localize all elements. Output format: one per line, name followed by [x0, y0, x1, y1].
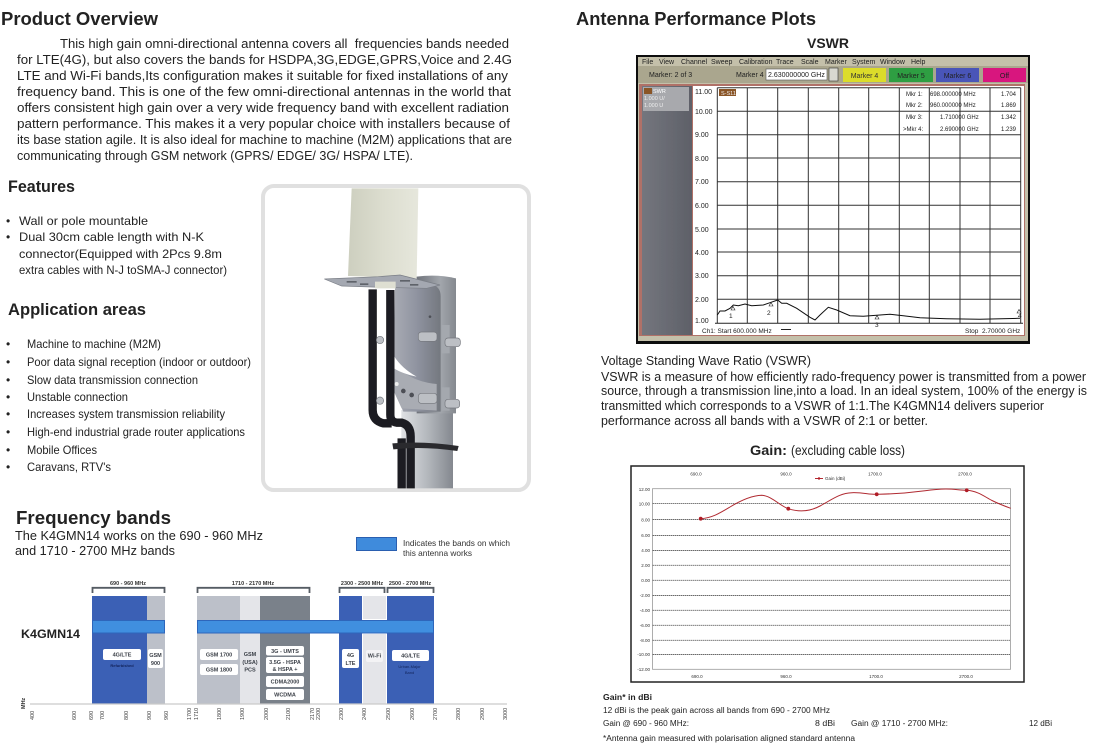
- frequency axis: 2900: [480, 708, 486, 720]
- text block: product overview paragraph: offers consistent high gain over a very wide frequency band with excellent radiation: [17, 101, 509, 115]
- list: application areas: Machine to machine (M2M): [27, 337, 161, 351]
- band notes: [110, 663, 421, 675]
- analyzer marker toolbar: Marker 4: [851, 73, 878, 80]
- frequency axis: 960: [164, 711, 170, 720]
- icon: antenna on mounting pole: [324, 188, 460, 488]
- gain curve: [701, 489, 1011, 519]
- band range labels: 2300 - 2500 MHz: [341, 581, 383, 587]
- analyzer menu bar: [642, 59, 926, 66]
- chart: VSWR analyzer screenshot: S-S11: [721, 91, 736, 97]
- list: application areas: Increases system transmission reliability: [27, 407, 225, 421]
- gain x axis labels: 1700.0: [869, 674, 883, 679]
- band label boxes: [103, 646, 429, 700]
- gain y axis labels: -8.00: [640, 638, 650, 643]
- chart: VSWR analyzer screenshot: 1: [729, 313, 733, 320]
- analyzer menu bar: Scale: [801, 59, 819, 66]
- text block: gain notes: Gain @ 690 - 960 MHz:: [603, 719, 689, 728]
- analyzer menu bar: Channel: [681, 59, 708, 66]
- list: application areas: •: [6, 337, 10, 351]
- analyzer menu bar: Marker: [825, 59, 847, 66]
- VSWR y axis labels: 9.00: [695, 132, 709, 139]
- text block: gain notes: 8 dBi: [815, 719, 835, 728]
- text block: frequency description: [15, 528, 263, 558]
- VSWR y axis labels: 11.00: [695, 89, 712, 96]
- band label text: 3.5G - HSPA: [269, 660, 301, 666]
- frequency axis: 900: [147, 711, 153, 720]
- band range labels: 1710 - 2170 MHz: [232, 581, 274, 587]
- gain y axis labels: -2.00: [640, 593, 650, 598]
- frequency axis: 2700: [433, 708, 439, 720]
- text block: VSWR explanation: Voltage Standing Wave Ratio (VSWR): [601, 354, 811, 368]
- VSWR y axis labels: 6.00: [695, 203, 709, 210]
- band label text: GSM 1700: [206, 652, 232, 658]
- gain y axis labels: -6.00: [640, 623, 650, 628]
- list: application areas: •: [6, 443, 10, 457]
- band label text: 3G - UMTS: [271, 649, 299, 655]
- text block: gain notes: Gain* in dBi: [603, 693, 652, 702]
- analyzer plot grid: [715, 88, 1023, 323]
- analyzer marker toolbar: Marker 5: [897, 73, 925, 80]
- gain plot area and grid: [652, 489, 1010, 669]
- text block: frequency description: and 1710 - 2700 MHz bands: [15, 543, 175, 558]
- text block: product overview paragraph: for LTE(4G), but also covers the bands for HSDPA,3G,EDGE,GPRS,Voice and 2.4G: [17, 53, 512, 67]
- frequency axis: 3000: [503, 708, 509, 720]
- text block: product overview paragraph: This high gain omni-directional antenna covers all frequencies bands needed: [60, 37, 509, 51]
- list: features: •: [6, 214, 10, 228]
- gain legend: [815, 476, 846, 481]
- list: application areas: Poor data signal reception (indoor or outdoor): [27, 355, 251, 369]
- text block: frequency description: The K4GMN14 works on the 690 - 960 MHz: [15, 528, 263, 543]
- list: application areas: Unstable connection: [27, 390, 128, 404]
- list: application areas: High-end industrial grade router applications: [27, 425, 245, 439]
- sweep range: Stop 2.70000 GHz: [965, 328, 1020, 335]
- band label text: [113, 649, 420, 698]
- VSWR y axis labels: 7.00: [695, 179, 709, 186]
- chart: VSWR analyzer screenshot: 4: [1018, 313, 1022, 320]
- gain y axis labels: [637, 487, 650, 672]
- antenna coverage bars: [92, 620, 434, 633]
- list: application areas: •: [6, 425, 10, 439]
- gain x axis labels: 690.0: [691, 674, 703, 679]
- text block: VSWR explanation: [601, 354, 1087, 428]
- panel: antenna product photo: [263, 186, 529, 490]
- frequency axis: 2400: [362, 708, 368, 720]
- frequency axis: MHz: [21, 697, 27, 709]
- analyzer menu bar: Help: [911, 59, 926, 66]
- text block: product overview paragraph: communicating through GSM network (GPRS/ EDGE/ 3G/ HSPA/ LTE).: [17, 149, 413, 163]
- marker readout: 1.869: [1001, 103, 1017, 109]
- list: application areas: •: [6, 373, 10, 387]
- marker readout: 1.239: [1001, 127, 1017, 133]
- marker readout: 1.704: [1001, 92, 1017, 98]
- band range brackets: [92, 588, 434, 593]
- frequency axis: 1700: [187, 708, 193, 720]
- analyzer menu bar: View: [659, 59, 675, 66]
- heading: Frequency bands: Frequency bands: [16, 508, 171, 528]
- chart: frequency band diagram: [21, 581, 509, 720]
- band range labels: 690 - 960 MHz: [110, 581, 146, 587]
- gain y axis labels: 2.00: [641, 563, 650, 568]
- gain x axis labels: 2700.0: [959, 674, 973, 679]
- gain x axis labels: 2700.0: [958, 472, 972, 476]
- marker readout: >Mkr 4:: [903, 127, 924, 133]
- marker readout: Mkr 3:: [906, 115, 923, 121]
- analyzer marker toolbar: Marker: 2 of 3: [649, 72, 692, 79]
- heading: Application areas: Application areas: [8, 300, 146, 319]
- list: application areas: Caravans, RTV's: [27, 460, 111, 474]
- analyzer side panel: 1.000 U: [644, 103, 663, 109]
- text block: gain notes: Gain @ 1710 - 2700 MHz:: [851, 719, 948, 728]
- marker readout: 1.342: [1001, 115, 1017, 121]
- list: features: •: [6, 230, 10, 244]
- analyzer side panel: 1.000 U/: [644, 96, 665, 102]
- VSWR y axis labels: 10.00: [695, 109, 713, 116]
- list: application areas: •: [6, 407, 10, 421]
- list: application areas: [6, 337, 251, 474]
- frequency axis: 2100: [286, 708, 292, 720]
- text block: VSWR explanation: source, through a transmission line,into a load. In an ideal system, 100% of the energy is: [601, 384, 1087, 398]
- marker readout: 1.710000 GHz: [940, 115, 979, 121]
- VSWR y axis labels: 5.00: [695, 227, 709, 234]
- frequency axis: 2600: [410, 708, 416, 720]
- analyzer menu bar: Trace: [776, 59, 794, 66]
- VSWR y axis labels: 1.00: [695, 318, 709, 325]
- gain y axis labels: -10.00: [637, 652, 650, 657]
- analyzer marker toolbar: Off: [1000, 73, 1009, 80]
- band notes: Urban-Major: [398, 664, 421, 669]
- band notes: Refurbished: [110, 663, 134, 668]
- band label text: CDMA2000: [271, 680, 299, 686]
- text block: product overview paragraph: its base station agile. It is also ideal for machine to machine (M2M) applications that are: [17, 133, 512, 147]
- chart: VSWR analyzer screenshot: 3: [875, 322, 879, 329]
- text block: gain notes: 12 dBi: [1029, 719, 1052, 728]
- band label text: PCS: [244, 668, 256, 674]
- frequency axis: 400: [30, 711, 36, 720]
- marker readout: 2.690000 GHz: [940, 127, 979, 133]
- text block: product overview paragraph: LTE and Wi-Fi bands,Its configuration makes it suitable for fixed installations of any: [17, 69, 509, 83]
- heading: VSWR: VSWR: [807, 35, 849, 51]
- band notes: Band: [405, 670, 414, 675]
- frequency axis: 700: [100, 711, 106, 720]
- band columns: [92, 596, 434, 704]
- band label text: 4G/LTE: [113, 652, 132, 658]
- list: features: Wall or pole mountable: [19, 214, 148, 228]
- gain y axis labels: 8.00: [641, 518, 650, 522]
- VSWR y axis labels: 3.00: [695, 273, 709, 280]
- marker readout: Mkr 2:: [906, 103, 923, 109]
- gain data points: [699, 488, 969, 521]
- legend: bands indicator: this antenna works: [403, 548, 472, 558]
- marker readout: 960.000000 MHz: [930, 103, 976, 109]
- VSWR markers: [731, 302, 1021, 319]
- list: features: [6, 214, 227, 277]
- heading: Antenna Performance Plots: Antenna Performance Plots: [576, 9, 816, 29]
- marker readout: 698.000000 MHz: [930, 92, 976, 98]
- heading: Gain: Gain:: [750, 442, 787, 458]
- text block: VSWR explanation: transmitted which corresponds to a VSWR of 1:1.The K4GMN14 delivers superior: [601, 399, 1044, 413]
- chart: VSWR analyzer screenshot: 2: [767, 310, 771, 317]
- gain y axis labels: 6.00: [641, 533, 650, 538]
- legend: bands indicator: Indicates the bands on which: [403, 538, 510, 548]
- analyzer menu bar: Window: [880, 59, 906, 66]
- gain y axis labels: -4.00: [640, 608, 650, 613]
- VSWR y axis labels: 2.00: [695, 297, 709, 304]
- text block: gain notes: *Antenna gain measured with polarisation aligned standard antenna: [603, 734, 856, 743]
- analyzer menu bar: System: [852, 59, 876, 66]
- heading: Product Overview: Product Overview: [1, 9, 159, 29]
- sweep range: Ch1: Start 600.000 MHz: [702, 328, 772, 335]
- text block: product overview paragraph: pattern performance. This makes it a very popular choice with installers because of: [17, 117, 510, 131]
- frequency axis: 2300: [339, 708, 345, 720]
- marker readout: Mkr 1:: [906, 92, 923, 98]
- list: application areas: •: [6, 460, 10, 474]
- band label text: & HSPA +: [273, 667, 297, 673]
- list: application areas: •: [6, 355, 10, 369]
- gain x axis labels: [690, 472, 973, 679]
- analyzer marker toolbar: [638, 66, 1028, 83]
- list: application areas: •: [6, 390, 10, 404]
- analyzer side panel: SWR: [653, 89, 666, 95]
- heading: Gain: [750, 442, 905, 458]
- text block: VSWR explanation: VSWR is a measure of how efficiently rado-frequency power is transmitted from a power: [601, 370, 1086, 384]
- band label text: GSM: [244, 652, 257, 658]
- band label text: WCDMA: [274, 692, 296, 698]
- VSWR trace: [717, 300, 1020, 320]
- VSWR y axis labels: 8.00: [695, 156, 709, 163]
- gain legend: Gain (dBi): [825, 476, 846, 481]
- chart: VSWR analyzer screenshot: [636, 55, 1030, 344]
- frequency axis: 2000: [264, 708, 270, 720]
- analyzer marker toolbar: Marker 6: [944, 73, 971, 80]
- chart: gain vs frequency: [631, 466, 1024, 682]
- gain x axis labels: 1700.0: [868, 472, 882, 476]
- text block: VSWR explanation: performance across all bands with a VSWR of 2:1 or better.: [601, 414, 928, 428]
- analyzer marker toolbar: 2.630000000 GHz: [768, 72, 825, 79]
- gain y axis labels: 4.00: [641, 548, 650, 553]
- marker readout: [903, 92, 1017, 133]
- frequency axis: 1900: [240, 708, 246, 720]
- text block: product overview paragraph: [17, 37, 512, 163]
- list: application areas: Slow data transmission connection: [27, 373, 198, 387]
- frequency axis: 800: [124, 711, 130, 720]
- heading: Features: Features: [8, 177, 75, 196]
- text block: gain notes: 12 dBi is the peak gain across all bands from 690 - 2700 MHz: [603, 706, 830, 715]
- band label text: 900: [151, 661, 160, 667]
- frequency axis: 2800: [456, 708, 462, 720]
- list: features: Dual 30cm cable length with N-K: [19, 230, 204, 244]
- analyzer menu bar: Sweep: [711, 59, 733, 66]
- band label text: 4G: [347, 653, 354, 659]
- gain y axis labels: 0.00: [641, 578, 650, 583]
- frequency axis: 2500: [386, 708, 392, 720]
- gain y axis labels: 10.00: [639, 502, 650, 506]
- frequency axis: [21, 697, 509, 720]
- band range labels: [110, 581, 431, 587]
- list: features: connector(Equipped with 2Pcs 9.8m: [19, 247, 222, 261]
- gain y axis labels: 12.00: [639, 487, 650, 492]
- analyzer side panel: [642, 86, 692, 335]
- VSWR y axis labels: [695, 89, 713, 325]
- gain y axis labels: -12.00: [637, 667, 650, 672]
- frequency axis: 2170: [310, 708, 316, 720]
- band label text: Wi-Fi: [368, 654, 382, 660]
- text block: gain notes: [603, 693, 1052, 743]
- sweep range: [702, 328, 1020, 335]
- band label text: LTE: [346, 661, 356, 667]
- band label text: GSM 1800: [206, 668, 232, 674]
- frequency axis: 1800: [217, 708, 223, 720]
- list: application areas: Mobile Offices: [27, 443, 97, 457]
- heading: Gain: (excluding cable loss): [791, 442, 905, 458]
- band label text: (USA): [242, 660, 258, 666]
- frequency axis: 1710: [194, 708, 200, 720]
- text block: product overview paragraph: frequency band. This is one of the few omni-directional antennas in the world that: [17, 85, 512, 99]
- frequency axis: 2200: [316, 708, 322, 720]
- analyzer menu bar: Calibration: [739, 59, 773, 66]
- VSWR y axis labels: 4.00: [695, 250, 709, 257]
- band label text: GSM: [149, 653, 162, 659]
- gain x axis labels: 960.0: [780, 472, 792, 476]
- analyzer menu bar: File: [642, 59, 653, 66]
- gain x axis labels: 690.0: [690, 472, 702, 476]
- frequency axis: 600: [72, 711, 78, 720]
- list: features: extra cables with N-J toSMA-J connector): [19, 263, 227, 277]
- analyzer marker toolbar: Marker 4: [736, 72, 764, 79]
- legend: bands indicator: [356, 538, 510, 558]
- frequency axis: 690: [89, 711, 95, 720]
- band range labels: 2500 - 2700 MHz: [389, 581, 431, 587]
- label: K4GMN14: K4GMN14: [21, 627, 80, 641]
- band label text: 4G/LTE: [401, 654, 420, 660]
- gain x axis labels: 960.0: [780, 674, 792, 679]
